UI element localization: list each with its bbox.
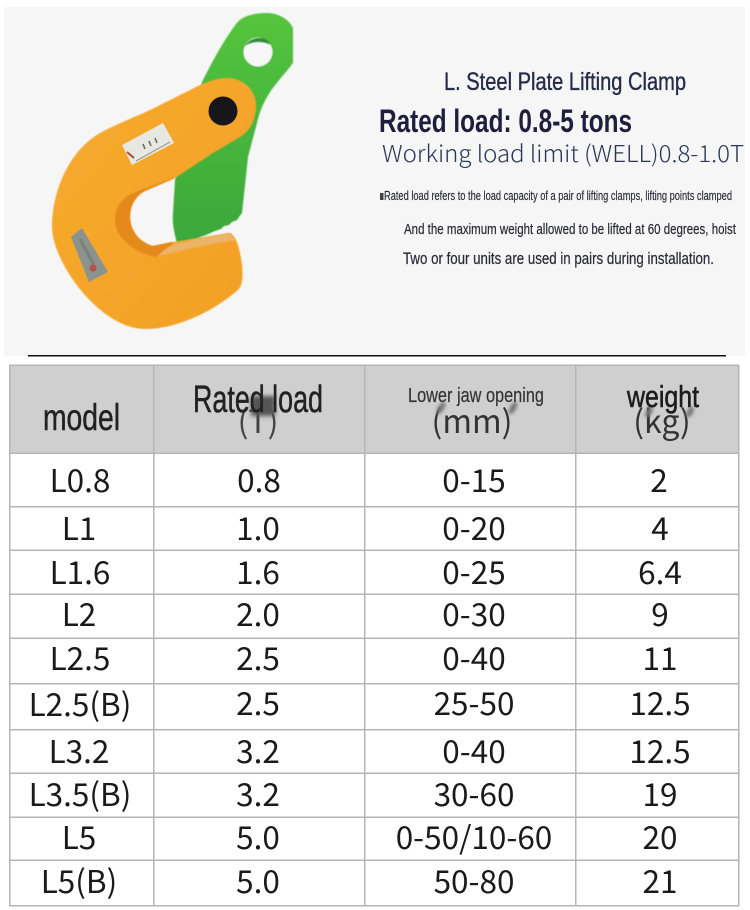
row: L5(B): 5.0 [236, 857, 280, 903]
row: L1: 0-20 [442, 504, 506, 550]
specification table [9, 364, 740, 906]
icon: black knob [208, 96, 238, 126]
row: L2.5: 11 [643, 634, 677, 680]
row: L3.5(B): 3.2 [236, 770, 280, 816]
row: L5: 0-50/10-60 [396, 813, 552, 859]
row: L1 [62, 504, 669, 550]
header: rated load: (T) [238, 397, 278, 443]
row: L1.6: 0-25 [442, 548, 506, 594]
header: lower jaw opening [408, 385, 544, 443]
row: L3.2: 0-40 [442, 727, 506, 773]
row: L0.8 [50, 456, 668, 502]
header: weight [626, 379, 699, 443]
row: L1.6: L1.6 [50, 548, 110, 594]
row: L3.5(B): 19 [643, 770, 677, 816]
row: L2.5(B): 25-50 [434, 679, 514, 725]
row: L5(B): L5(B) [41, 857, 117, 903]
rated load heading: Rated load: 0.8-5 tons [379, 103, 632, 139]
title: L. Steel Plate Lifting Clamp [444, 68, 686, 96]
header: model: model [43, 397, 120, 438]
divider line [28, 355, 726, 356]
note marker [380, 193, 384, 200]
row: L2.5(B): 12.5 [629, 679, 691, 725]
jaw teeth shading [157, 233, 236, 257]
hole bevel [115, 178, 175, 257]
row: L2: 9 [651, 590, 669, 636]
row: L0.8: 0.8 [237, 456, 281, 502]
row: L1.6 [50, 548, 682, 594]
row: L5 [62, 813, 677, 859]
header: lower jaw opening: (mm) [432, 397, 512, 443]
row: L2: L2 [62, 590, 96, 636]
icon: orange clamp body [52, 78, 256, 329]
header: rated load [193, 379, 323, 443]
row: L1: 4 [651, 504, 669, 550]
row: L3.2 [49, 727, 691, 773]
row: L3.5(B): L3.5(B) [29, 770, 131, 816]
row: L2.5: 0-40 [442, 634, 506, 680]
header: weight: weight [626, 379, 699, 414]
row: L3.5(B) [29, 770, 677, 816]
header: weight: (kg) [633, 397, 691, 443]
row: L2.5: 2.5 [236, 634, 280, 680]
row: L5: 5.0 [236, 813, 280, 859]
table header background [9, 365, 739, 453]
row: L1: L1 [62, 504, 96, 550]
row: L2: 0-30 [442, 590, 506, 636]
row: L5(B): 21 [643, 857, 677, 903]
label: grey nameplate [71, 228, 108, 282]
header: rated load: Rated load [193, 379, 323, 421]
row: L2 [62, 590, 669, 636]
row: L5(B): 50-80 [434, 857, 514, 903]
row: L3.2: 12.5 [629, 727, 691, 773]
row: L1.6: 1.6 [236, 548, 280, 594]
row: L0.8: 0-15 [442, 456, 506, 502]
row: L2.5(B): 2.5 [236, 679, 280, 725]
row: L2: 2.0 [236, 590, 280, 636]
row: L2.5(B) [29, 679, 691, 726]
row: L3.5(B): 30-60 [434, 770, 514, 816]
row: L3.2: L3.2 [49, 727, 109, 773]
row: L5: 20 [643, 813, 677, 859]
row: L2.5 [50, 634, 677, 680]
table grid [9, 364, 740, 906]
row: L0.8: 2 [650, 456, 668, 502]
label: white sticker [122, 123, 174, 165]
icon: green clamp arm [173, 13, 293, 243]
row: L0.8: L0.8 [50, 456, 110, 502]
row: L1: 1.0 [236, 504, 280, 550]
row: L2.5: L2.5 [50, 634, 110, 680]
row: L5: L5 [62, 813, 96, 859]
row: L1.6: 6.4 [638, 548, 682, 594]
row: L2.5(B): L2.5(B) [29, 680, 131, 726]
row: L5(B) [41, 857, 677, 903]
row: L3.2: 3.2 [236, 727, 280, 773]
working load limit: Working load limit (WELL)0.8-1.0T [382, 135, 744, 169]
product photo panel [4, 7, 745, 356]
header: lower jaw opening: Lower jaw opening [408, 385, 544, 407]
